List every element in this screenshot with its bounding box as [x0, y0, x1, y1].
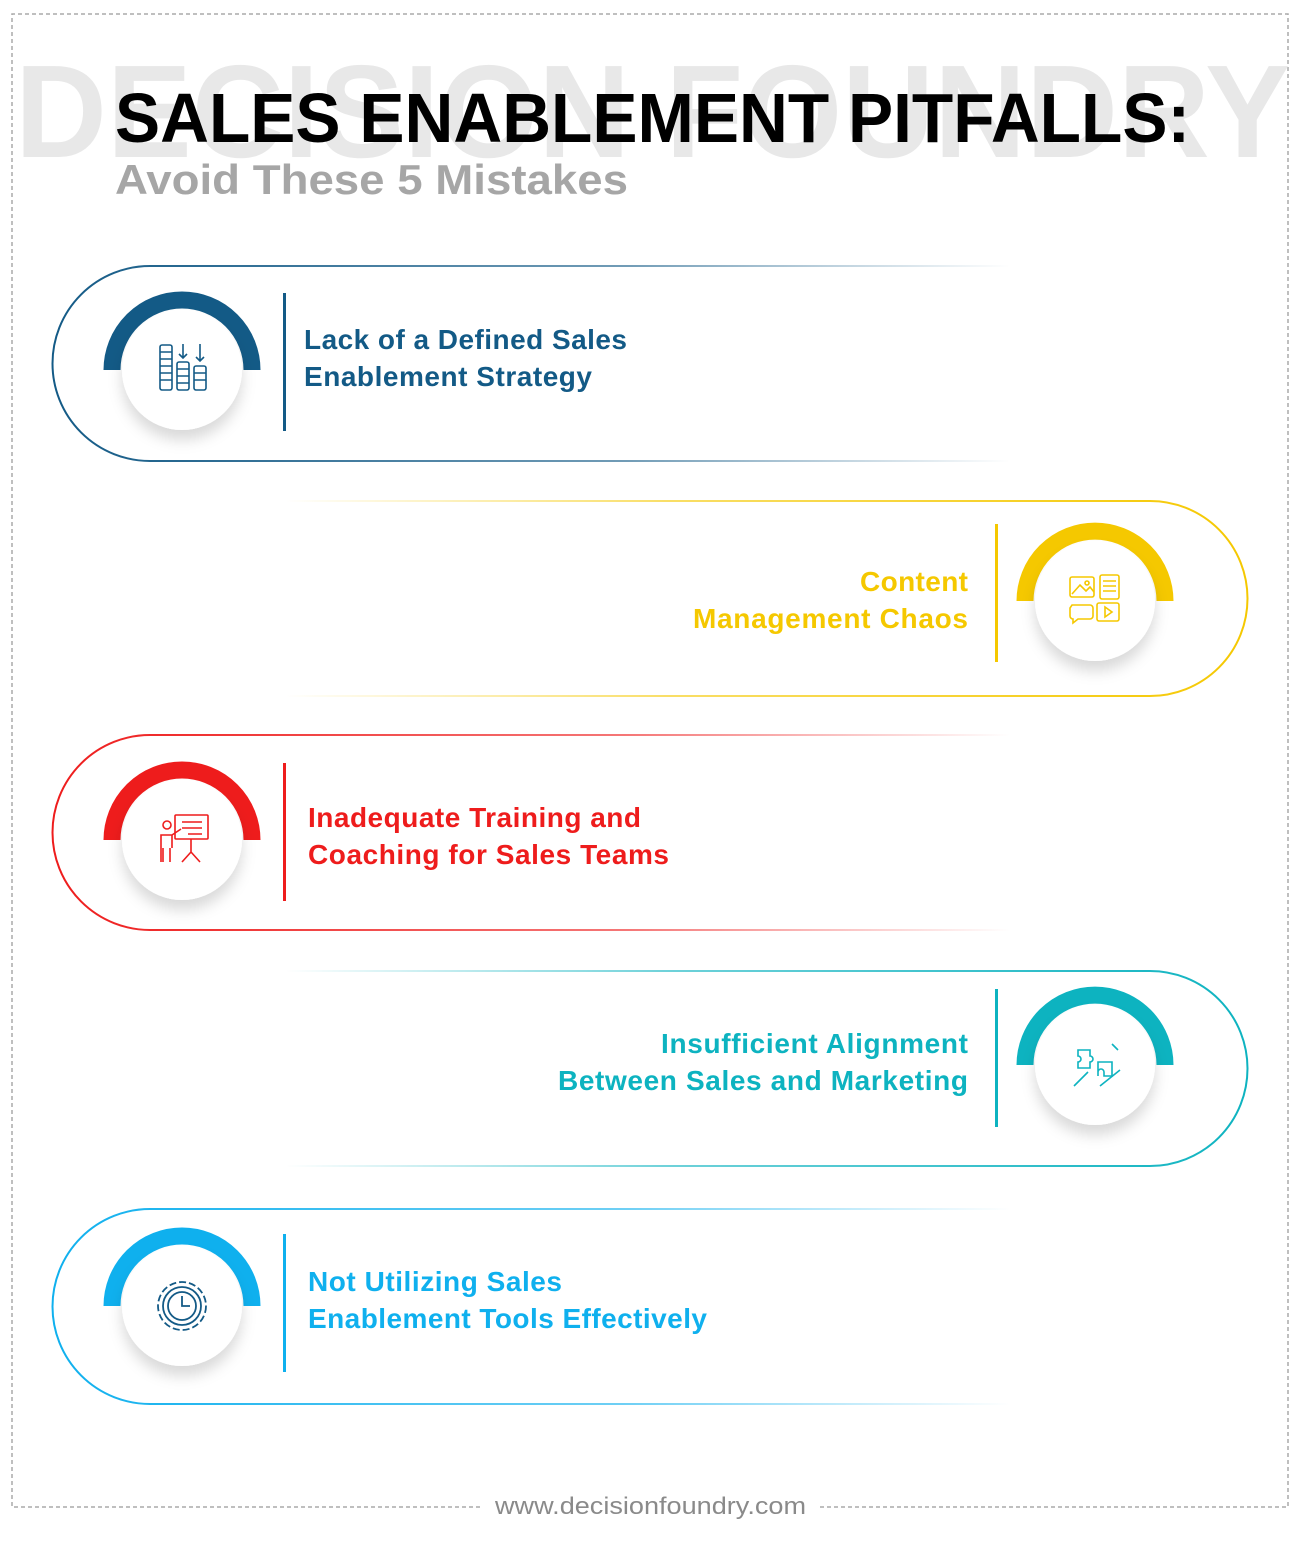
footer url: www.decisionfoundry.com [494, 1493, 806, 1520]
text: mistake 4: Between Sales and Marketing [558, 1065, 968, 1096]
icon: arc and circle 4 [1025, 995, 1165, 1125]
text: mistake 5: Not Utilizing Sales [308, 1266, 562, 1297]
icon: arc and circle 1 [112, 300, 252, 430]
text: mistake 1: Lack of a Defined Sales [304, 324, 627, 355]
text: mistake 2: Management Chaos [693, 603, 968, 634]
panel: mistake 2 [285, 501, 1248, 696]
icon: arc and circle 5 [112, 1236, 252, 1366]
text: mistake 3: Inadequate Training and [308, 802, 641, 833]
text: mistake 5: Enablement Tools Effectively [308, 1303, 707, 1334]
subtitle: Avoid These 5 Mistakes [115, 156, 628, 203]
panel: mistake 1 [53, 266, 1010, 461]
panel: mistake 5 [53, 1209, 1010, 1404]
watermark: DECISION FOUNDRY [15, 38, 1290, 185]
icon: arc and circle 3 [112, 770, 252, 900]
text: mistake 1: Enablement Strategy [304, 361, 592, 392]
title: SALES ENABLEMENT PITFALLS: [115, 79, 1190, 157]
panel: mistake 3 [53, 735, 1010, 930]
text: mistake 4: Insufficient Alignment [661, 1028, 968, 1059]
text: mistake 3: Coaching for Sales Teams [308, 839, 669, 870]
text: mistake 2: Content [860, 566, 968, 597]
panel: mistake 4 [285, 971, 1248, 1166]
icon: arc and circle 2 [1025, 531, 1165, 661]
